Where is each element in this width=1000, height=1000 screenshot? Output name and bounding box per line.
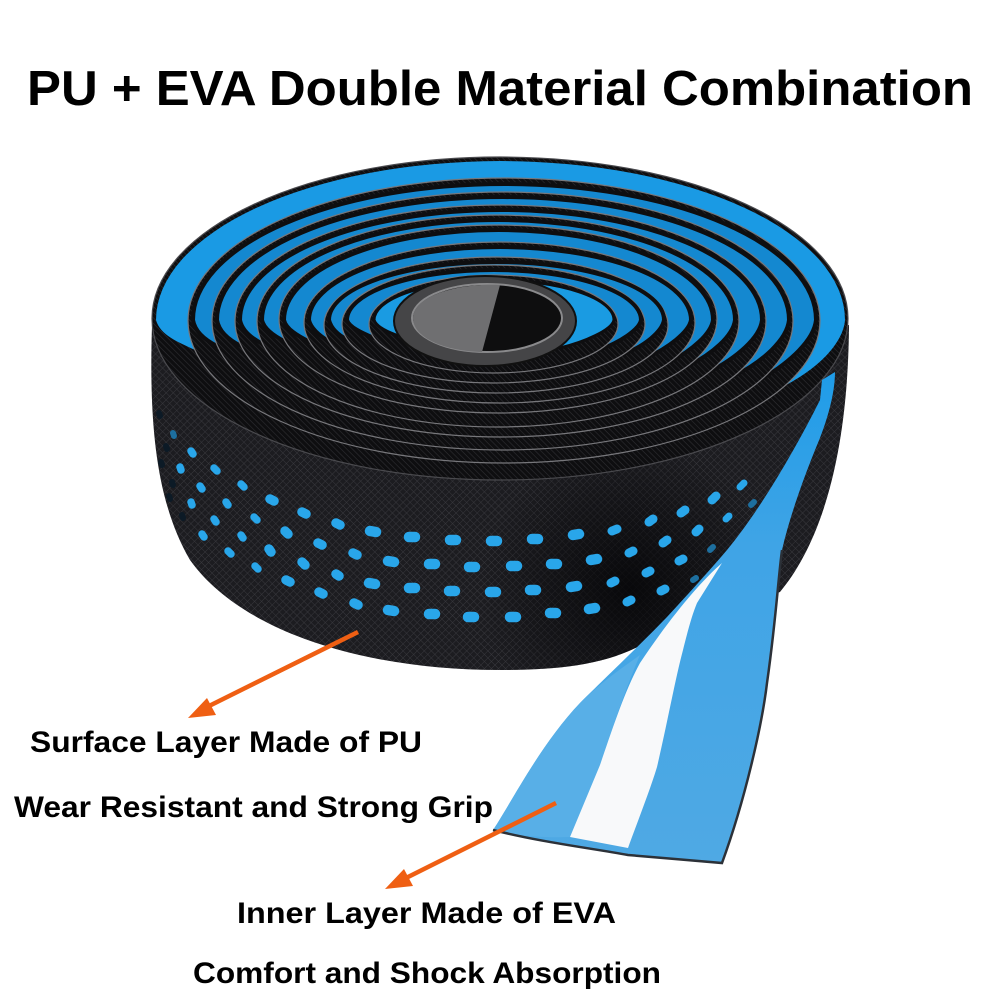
arrow: surface layer	[188, 632, 358, 718]
label: surface layer: Surface Layer Made of PU	[30, 726, 422, 759]
white adhesive backing	[570, 563, 722, 848]
lighter fold band	[493, 655, 640, 837]
blue strip	[493, 372, 835, 863]
coiled top with blue inner and dark walls	[152, 157, 848, 480]
icon: end plug cap	[394, 276, 576, 366]
label: inner layer benefit: Comfort and Shock Absorption	[193, 957, 661, 990]
dark strip edge	[493, 550, 782, 863]
label: surface layer benefit: Wear Resistant and Strong Grip	[14, 791, 493, 824]
peeled strip with EVA inner layer	[493, 372, 835, 863]
title: PU + EVA Double Material Combination	[27, 62, 973, 116]
perforated holes showing blue inner layer	[159, 413, 754, 617]
label: inner layer: Inner Layer Made of EVA	[237, 897, 616, 930]
arrow: inner layer	[385, 803, 556, 889]
roll outer side wall	[151, 325, 849, 670]
bar tape roll	[151, 157, 849, 863]
